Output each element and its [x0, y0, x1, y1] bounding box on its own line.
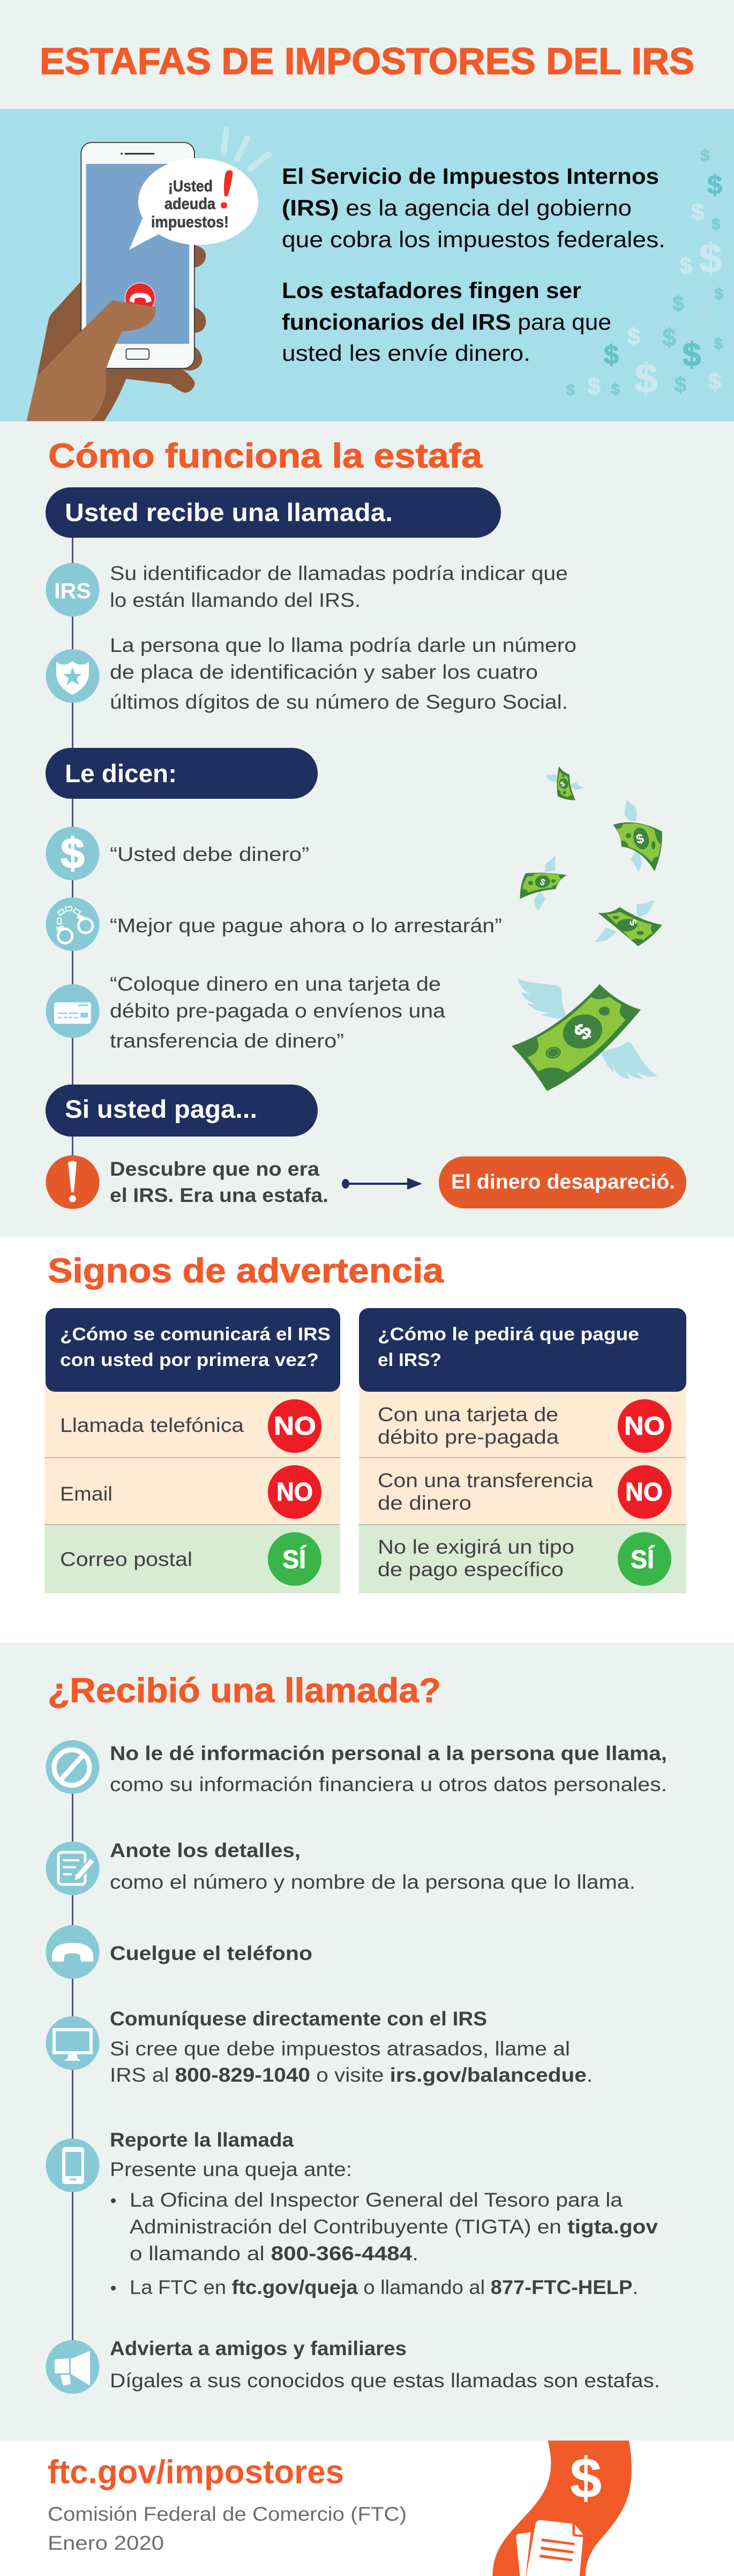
footer link: ftc.gov/impostores [48, 2454, 344, 2491]
table: how to pay: ¿Cómo le pedirá que pague [378, 1324, 639, 1345]
arrow [342, 1178, 422, 1190]
decoration: dollar signs: $ [604, 340, 619, 370]
hero text: scammers pretend [282, 278, 611, 366]
decoration: dollar signs: $ [627, 324, 640, 350]
table: first contact: Correo postal [60, 1548, 192, 1570]
text: report the call: La Oficina del Inspector General del Tesoro para la [130, 2189, 623, 2211]
hero text: what is the IRS [282, 164, 665, 252]
icon: card [46, 984, 100, 1038]
table: how to pay: débito pre-pagada [378, 1426, 559, 1448]
icon: exclamation [46, 1155, 100, 1209]
text: arrest threat: “Mejor que pague ahora o lo arrestarán” [110, 915, 502, 937]
decoration: dollar signs: $ [699, 235, 722, 281]
pill: money gone: El dinero desapareció. [451, 1171, 675, 1193]
decoration: dollar signs: $ [691, 199, 704, 225]
icon: mobile phone [46, 2139, 100, 2192]
illustration: small flying bills: $ [627, 918, 640, 927]
illustration: large flying bill: $ [569, 1019, 597, 1044]
illustration: hand holding phone [27, 143, 206, 421]
illustration: small flying bills [520, 766, 662, 946]
speech bubble: ¡Usted [168, 177, 213, 195]
decoration: dollar signs: $ [566, 382, 575, 399]
text: contact the IRS: IRS al 800-829-1040 o visite irs.gov/balancedue . [110, 2064, 593, 2086]
text: you owe money: “Usted debe dinero” [110, 843, 309, 865]
text: warn friends [110, 2337, 660, 2392]
decoration: dollar signs: $ [611, 381, 620, 398]
text: it was a scam: Descubre que no era [110, 1158, 319, 1180]
text: prepaid card: “Coloque dinero en una tarjeta de [110, 973, 441, 995]
text: badge number: de placa de identificación y saber los cuatro [110, 661, 538, 683]
panel: hero introduction [0, 109, 734, 421]
timeline line [72, 1767, 73, 2367]
table: first contact [44, 1308, 340, 1593]
decoration: dollar signs: $ [588, 374, 601, 399]
pill: if you pay [46, 1085, 318, 1137]
text: hang up: Cuelgue el teléfono [110, 1942, 312, 1964]
heading: ¿Recibió una llamada? [48, 1671, 441, 1710]
text: badge number: últimos dígitos de su número de Seguro Social. [110, 691, 568, 713]
table: how to pay: de pago específico [378, 1558, 564, 1580]
decoration: dollar signs: $ [672, 293, 684, 315]
icon: dollar [46, 827, 100, 880]
panel: how the scam works [0, 421, 734, 1237]
text: report the call: Administración del Contribuyente (TIGTA) en tigta.gov [130, 2216, 658, 2238]
text: contact the IRS: Comuníquese directamente con el IRS [110, 2008, 487, 2030]
pill: if you pay: Si usted paga... [65, 1095, 257, 1123]
text: note details: como el número y nombre de la persona que lo llama. [110, 1871, 635, 1893]
text: no personal info: No le dé información personal a la persona que llama, [110, 1742, 667, 1764]
icon: IRS [46, 563, 100, 617]
table: first contact: Email [60, 1483, 113, 1505]
decoration: dollar signs: $ [715, 286, 723, 303]
table: first contact: NO [276, 1478, 313, 1506]
footer credit: Enero 2020 [48, 2532, 164, 2554]
text: report the call [110, 2129, 658, 2298]
icon: megaphone [46, 2340, 100, 2394]
decoration: dollar signs: $ [682, 336, 701, 374]
table: first contact: NO [274, 1412, 316, 1441]
icon: prohibited [46, 1740, 100, 1794]
text: prepaid card: transferencia de dinero” [110, 1030, 344, 1052]
timeline line [72, 536, 73, 1182]
text: badge number: La persona que lo llama podría darle un número [110, 634, 576, 656]
text: caller ID: Su identificador de llamadas podría indicar que [110, 562, 568, 584]
table: how to pay: Con una tarjeta de [378, 1404, 558, 1426]
decoration: dollar signs: $ [708, 369, 721, 395]
decoration: dollar signs: $ [714, 336, 723, 353]
text: report the call: Presente una queja ante: [110, 2158, 352, 2180]
footer credit: Comisión Federal de Comercio (FTC) [48, 2503, 407, 2525]
icon: badge [46, 649, 100, 703]
pill: they say [46, 748, 318, 799]
illustration: ribbon with dollar and documents: $ [570, 2446, 602, 2510]
text: contact the IRS [110, 2008, 593, 2086]
table: how to pay: de dinero [378, 1492, 471, 1514]
text: caller ID [110, 562, 568, 611]
pill: money gone [439, 1156, 686, 1208]
text: prepaid card [110, 973, 445, 1052]
pill: you get a call: Usted recibe una llamada. [65, 498, 393, 526]
panel: did you get a call [0, 1643, 734, 2440]
text: it was a scam: el IRS. Era una estafa. [110, 1184, 328, 1206]
icon: note [46, 1842, 100, 1895]
table: how to pay: NO [624, 1412, 665, 1441]
illustration: small flying bills: $ [635, 832, 646, 847]
table: how to pay: el IRS? [378, 1350, 441, 1370]
hero text: scammers pretend: funcionarios del IRS para que [282, 309, 611, 335]
table: first contact: con usted por primera vez? [60, 1350, 319, 1370]
text: warn friends: Dígales a sus conocidos que estas llamadas son estafas. [110, 2370, 660, 2392]
text: no personal info [110, 1742, 667, 1795]
text: no personal info: como su información financiera u otros datos personales. [110, 1773, 667, 1795]
speech bubble: impuestos! [151, 213, 229, 231]
hero text: what is the IRS: que cobra los impuestos federales. [282, 227, 665, 252]
table: first contact: ¿Cómo se comunicará el IRS [60, 1324, 331, 1345]
decoration: dollar signs: $ [675, 373, 686, 397]
decoration: dollar signs: $ [700, 146, 710, 165]
decoration: dollar signs: $ [635, 355, 657, 402]
icon: monitor [46, 2016, 100, 2070]
table: how to pay: SÍ [631, 1545, 655, 1574]
hero text: scammers pretend: usted les envíe dinero. [282, 340, 530, 366]
speech bubble [129, 158, 258, 250]
panel: warning signs [44, 1251, 686, 1593]
heading: Signos de advertencia [48, 1251, 444, 1290]
table: first contact: Llamada telefónica [60, 1414, 244, 1436]
icon: sound rays [223, 130, 268, 169]
footer [48, 2440, 632, 2576]
text: report the call: Reporte la llamada [110, 2129, 294, 2151]
speech bubble: adeuda [164, 195, 215, 213]
title: ESTAFAS DE IMPOSTORES DEL IRS [40, 40, 694, 82]
table: how to pay: NO [625, 1478, 663, 1506]
decoration: dollar signs [566, 130, 724, 402]
text: prepaid card: débito pre-pagada o envíenos una [110, 1000, 445, 1022]
text: note details [110, 1839, 635, 1893]
text: it was a scam [110, 1158, 328, 1206]
decoration: dollar signs: $ [679, 253, 692, 279]
text: report the call: La FTC en ftc.gov/queja o llamando al 877-FTC-HELP. [130, 2276, 638, 2298]
decoration: dollar signs: $ [662, 323, 676, 351]
hero text: what is the IRS: El Servicio de Impuestos Internos [282, 164, 659, 189]
illustration: large flying bill [512, 977, 657, 1091]
pill: you get a call [46, 487, 501, 538]
icon: IRS: IRS [54, 578, 91, 603]
table: first contact: SÍ [282, 1545, 307, 1574]
text: report the call: o llamando al 800-366-4484 . [130, 2243, 418, 2265]
icon: handcuffs [46, 897, 100, 951]
text: note details: Anote los detalles, [110, 1839, 301, 1861]
text: badge number [110, 634, 576, 713]
icon: hang up [46, 1925, 100, 1979]
table: how to pay: Con una transferencia [378, 1469, 593, 1491]
hero text: scammers pretend: Los estafadores fingen ser [282, 278, 581, 303]
illustration: small flying bills: $ [559, 780, 566, 789]
header band [0, 0, 734, 109]
pill: they say: Le dicen: [65, 759, 177, 788]
text: contact the IRS: Si cree que debe impuestos atrasados, llame al [110, 2038, 570, 2060]
heading: Cómo funciona la estafa [48, 436, 482, 475]
text: warn friends: Advierta a amigos y familiares [110, 2337, 407, 2359]
illustration: small flying bills: $ [538, 877, 547, 888]
text: caller ID: lo están llamando del IRS. [110, 589, 361, 611]
hero text: what is the IRS: (IRS) es la agencia del gobierno [282, 195, 632, 220]
footer credit [48, 2503, 407, 2554]
decoration: dollar signs: $ [707, 170, 722, 200]
decoration: dollar signs: $ [711, 130, 724, 155]
table: how to pay [359, 1308, 686, 1593]
icon: dollar: $ [61, 829, 85, 877]
illustration: ribbon with dollar and documents [492, 2440, 632, 2576]
table: how to pay: No le exigirá un tipo [378, 1536, 574, 1558]
decoration: dollar signs: $ [711, 216, 720, 233]
decoration: dollar signs: $ [695, 299, 713, 333]
